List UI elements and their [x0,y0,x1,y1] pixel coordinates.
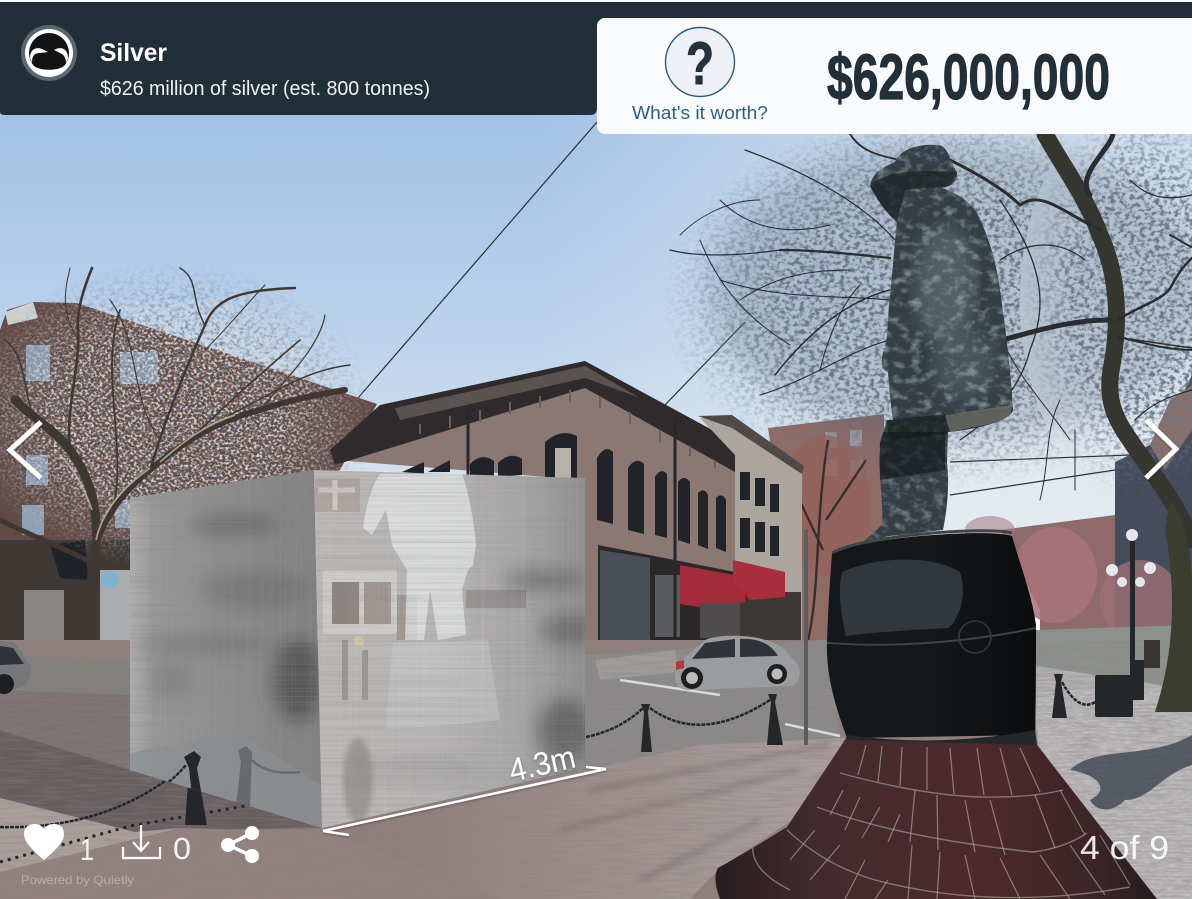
header bar [0,2,1192,115]
icon: heart [24,824,64,860]
centre heritage building [330,361,804,655]
icon: download [123,825,160,858]
download control [123,825,191,866]
left bare tree [0,266,373,580]
bronze statue on barrel pedestal [700,140,1170,899]
overhead wires [330,122,1130,495]
brick flare [700,735,1170,899]
cube right face [312,465,600,835]
silver cube [125,465,600,835]
sky [0,100,1192,580]
panel title: Silver [100,39,167,67]
carousel arrow right [1146,420,1176,478]
like control [24,824,94,867]
reflected window [323,570,397,634]
powered by credit: Powered by Quietly [21,873,134,887]
ground: brick plaza [0,625,1192,899]
like count: 1 [80,832,94,867]
carousel arrow left [10,422,41,478]
barrel [827,533,1036,738]
question icon [666,28,734,97]
icon: share [221,826,259,863]
logo badge [21,25,77,81]
distant tree and background buildings [768,375,1192,640]
reflected statue [363,474,476,640]
cube left face [125,465,325,835]
bollards, lamp and bin [0,529,1160,862]
panel subtitle: $626 million of silver (est. 800 tonnes) [100,78,430,100]
dimension line [323,767,606,835]
page counter: 4 of 9 [1080,829,1169,866]
left edge car [0,641,31,697]
statue figure [860,140,1020,545]
left brick building [0,302,377,650]
large tree on right [640,130,1192,712]
question icon: ? [686,30,714,97]
value card [597,18,1192,134]
silver car [675,636,800,690]
download count: 0 [173,831,191,866]
dimension label: 4.3m [505,739,579,789]
question caption: What's it worth? [632,103,768,123]
